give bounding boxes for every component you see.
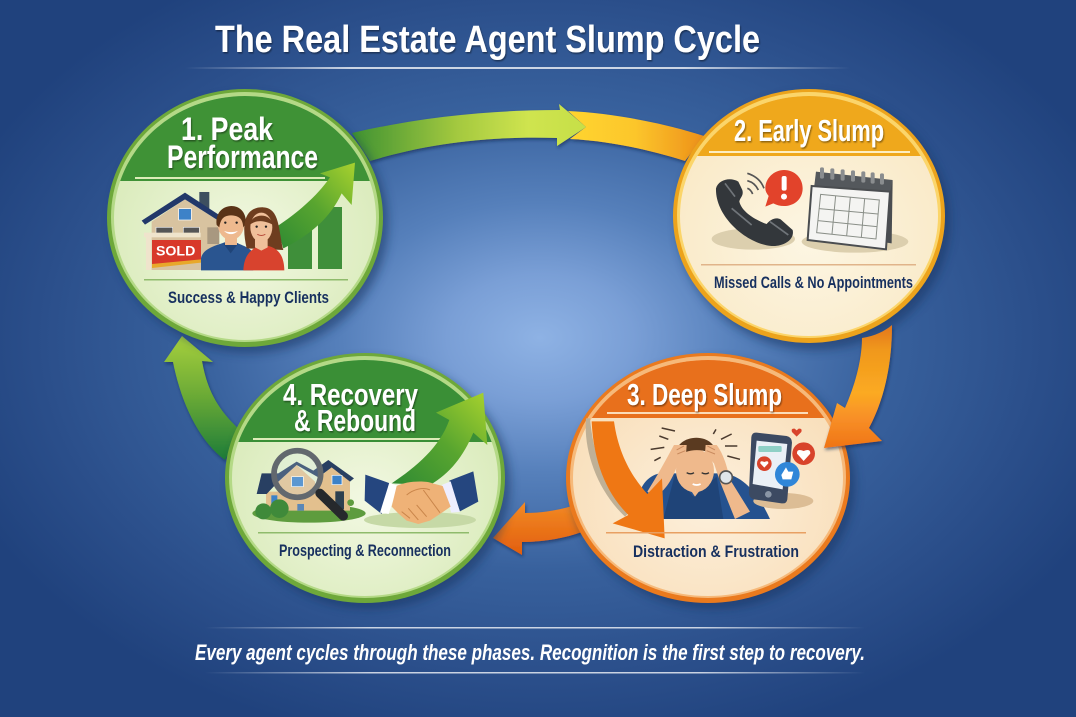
icon: happy clients — [201, 206, 284, 270]
arrow: recovery to peak — [164, 336, 240, 460]
heading text 1: Performance — [167, 139, 318, 175]
heading text 1 — [167, 111, 318, 175]
panel: 2 early slump — [673, 89, 950, 350]
heading band 1 — [120, 96, 370, 181]
icon: phone with social alerts — [749, 429, 815, 509]
panel: 1 peak performance — [107, 89, 388, 353]
heading band 2 — [697, 96, 921, 156]
arrow: early slump to deep slump — [824, 325, 892, 448]
icon: house and sold sign — [142, 192, 222, 270]
caption 3: Distraction & Frustration — [633, 543, 799, 561]
panel: 4 recovery and rebound — [225, 353, 510, 609]
icon: phone and alert — [712, 170, 803, 250]
icon: growth arrow — [277, 163, 355, 248]
icon: handshake — [364, 471, 478, 528]
icon: frustrated agent — [641, 428, 770, 519]
caption 2: Missed Calls & No Appointments — [714, 274, 913, 292]
heading text 3: 3. Deep Slump — [627, 377, 782, 412]
icon: calendar — [802, 167, 908, 253]
heading text 4 — [283, 377, 419, 438]
arrow: peak to early slump — [352, 104, 704, 161]
caption 4: Prospecting & Reconnection — [279, 542, 451, 560]
heading band 3 — [592, 360, 824, 418]
icon: growth bars — [288, 207, 342, 269]
title: The Real Estate Agent Slump Cycle — [215, 19, 760, 61]
sold label: SOLD — [156, 243, 195, 259]
heading text 2: 2. Early Slump — [734, 113, 884, 148]
heading text 1: 1. Peak — [181, 111, 273, 147]
panel: 3 deep slump — [566, 353, 855, 609]
heading text 4: & Rebound — [294, 403, 416, 438]
icon: downward arrow — [586, 418, 665, 538]
heading text 4: 4. Recovery — [283, 377, 419, 412]
caption 1: Success & Happy Clients — [168, 289, 329, 307]
icon: house under magnifier — [252, 451, 366, 523]
arrow: deep slump to recovery — [493, 502, 582, 555]
footer tagline: Every agent cycles through these phases. Recognition is the first step to recovery. — [195, 640, 865, 665]
heading band 4 — [238, 360, 492, 442]
icon: growth arrow — [392, 393, 487, 485]
